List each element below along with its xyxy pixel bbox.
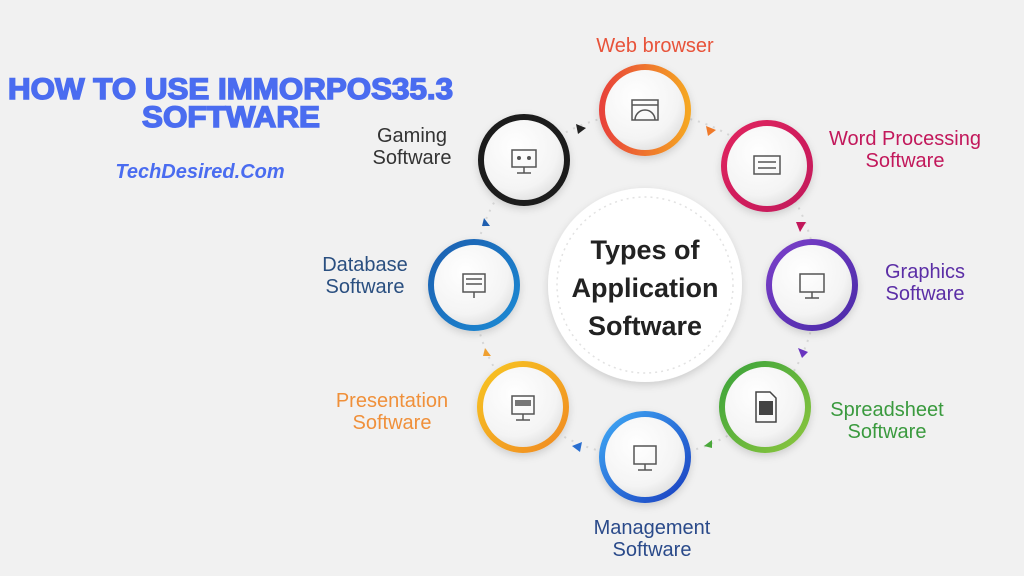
dotted orbit <box>473 113 817 457</box>
label: word processing: Word Processing <box>829 128 981 150</box>
label: presentation <box>336 390 448 434</box>
label: word processing: Software <box>866 150 944 172</box>
label: spreadsheet: Spreadsheet <box>830 399 944 421</box>
node: presentation <box>480 364 566 450</box>
node: management <box>602 414 688 500</box>
node: word processing <box>724 123 810 209</box>
label: graphics: Software <box>886 283 964 305</box>
label: graphics <box>885 261 965 305</box>
label: gaming: Software <box>373 147 451 169</box>
label: management <box>594 517 711 561</box>
label: presentation: Presentation <box>336 390 448 412</box>
arrows between nodes <box>482 124 808 452</box>
title: HOW TO USE IMMORPOS35.3 <box>8 73 453 106</box>
label: spreadsheet <box>830 399 944 443</box>
node: web browser <box>602 67 688 153</box>
node: gaming <box>481 117 567 203</box>
title <box>8 73 453 134</box>
label: spreadsheet: Software <box>848 421 926 443</box>
node: database <box>431 242 517 328</box>
label: management: Management <box>594 517 711 539</box>
title: SOFTWARE <box>142 101 320 134</box>
label: gaming <box>373 125 451 169</box>
label: management: Software <box>613 539 691 561</box>
label: database: Software <box>326 276 404 298</box>
label: web browser: Web browser <box>596 35 714 57</box>
node: graphics <box>769 242 855 328</box>
label: presentation: Software <box>353 412 431 434</box>
center circle <box>548 188 742 382</box>
subtitle: site name: TechDesired.Com <box>115 161 285 183</box>
label: database: Database <box>322 254 408 276</box>
label: gaming: Gaming <box>377 125 447 147</box>
center circle: Software <box>588 311 702 341</box>
label: database <box>322 254 408 298</box>
label: graphics: Graphics <box>885 261 965 283</box>
center circle: Application <box>572 273 718 303</box>
label: word processing <box>829 128 981 172</box>
center circle: Types of <box>590 235 701 265</box>
node: spreadsheet <box>722 364 808 450</box>
